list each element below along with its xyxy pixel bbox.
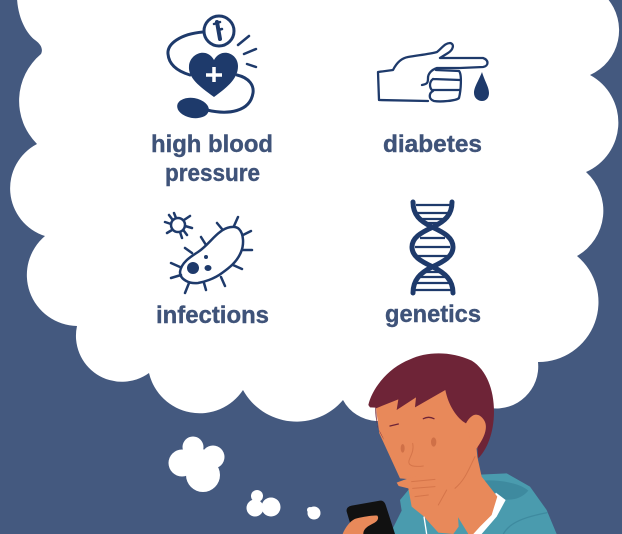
thought cloud bbox=[10, 0, 619, 422]
label: genetics: genetics bbox=[385, 301, 481, 328]
t-shirt bbox=[468, 493, 506, 534]
hand holding phone bbox=[343, 515, 378, 534]
hoodie fold bbox=[503, 513, 547, 534]
hand on chin bbox=[397, 473, 459, 534]
spots bbox=[187, 262, 199, 274]
gauge dial bbox=[204, 16, 234, 46]
label: diabetes: diabetes bbox=[383, 131, 482, 158]
eyes bbox=[390, 417, 434, 426]
heart bbox=[189, 53, 238, 97]
earphone cord bbox=[424, 517, 427, 534]
fist fingers bbox=[430, 70, 461, 101]
neck and face bbox=[376, 387, 497, 534]
label: high blood pressure: pressure bbox=[165, 160, 260, 187]
bulb bbox=[176, 95, 210, 121]
hair bbox=[368, 353, 494, 458]
phone bbox=[347, 501, 395, 534]
ear bbox=[466, 415, 486, 448]
blood drop bbox=[474, 72, 489, 101]
nose and cheek marks bbox=[401, 437, 436, 453]
label: infections: infections bbox=[156, 302, 269, 329]
large bubble bbox=[168, 436, 224, 492]
facial lines bbox=[409, 443, 475, 505]
icon: DNA helix bbox=[412, 202, 453, 293]
tube bbox=[168, 32, 253, 112]
strands bbox=[412, 202, 453, 293]
label: high blood pressure: high blood bbox=[151, 131, 273, 158]
icon: finger with blood drop bbox=[378, 43, 489, 101]
body bbox=[180, 227, 243, 283]
spines bbox=[171, 217, 252, 293]
pulse dashes bbox=[238, 36, 256, 67]
tiny bubble bbox=[307, 506, 320, 520]
icon: bacteria bbox=[165, 213, 252, 293]
label: high blood pressure bbox=[151, 131, 273, 187]
hand bbox=[378, 43, 488, 101]
hoodie shadow bbox=[482, 480, 528, 500]
rungs bbox=[415, 205, 451, 290]
medium bubble bbox=[246, 490, 280, 516]
icon: blood pressure monitor bbox=[168, 16, 256, 121]
small thought bubbles bbox=[168, 436, 320, 520]
hoodie bbox=[390, 473, 557, 534]
virus bbox=[165, 213, 192, 238]
plus sign bbox=[206, 67, 222, 82]
person bbox=[343, 353, 557, 534]
